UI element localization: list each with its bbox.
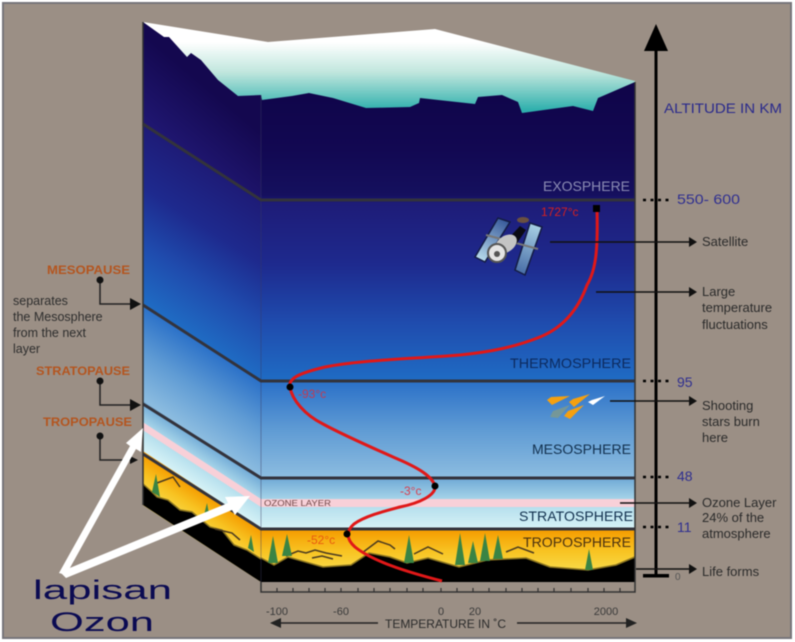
layer names [264,178,633,550]
right callouts: fluctuations [702,317,768,332]
left face upper part [143,22,261,201]
altitude values: 550- 600 [677,191,740,207]
layer names: MESOSPHERE [532,441,631,457]
altitude values: 95 [677,374,693,390]
left face of block [143,123,261,582]
left callouts: separates [13,294,68,308]
scale values [266,606,618,618]
altitude values [675,191,740,583]
left callouts: STRATOPAUSE [36,364,130,378]
icon: shooting stars [547,394,605,419]
altitude values: 0 [675,572,681,583]
atmosphere block [143,22,635,582]
right callouts: Life forms [702,564,760,579]
right callouts [550,234,777,579]
right callouts: atmosphere [702,526,771,541]
left callouts: MESOPAUSE [47,263,130,277]
callout: lapisan Ozon: lapisan [33,575,172,605]
axis caption: TEMPERATURE IN ˚C [385,617,506,631]
right callouts: temperature [702,300,772,315]
layer names: EXOSPHERE [543,178,630,194]
left callouts: from the next [13,326,86,340]
temperature readings: -3°c [400,484,421,498]
scale values: -60 [333,606,349,618]
right callouts: Satellite [702,234,748,249]
callout: lapisan Ozon [33,575,172,637]
curve markers [286,205,600,538]
temperature readings [298,205,578,547]
icon: satellite [475,217,542,275]
axis title: ALTITUDE IN KM [664,100,782,116]
altitude axis [643,24,782,583]
trees and mountains [152,474,593,570]
callout: lapisan Ozon: Ozon [50,607,154,637]
left face ground [143,484,261,582]
temperature readings: 1727°c [541,205,578,219]
temperature readings: -52°c [307,533,335,547]
left callouts: the Mesosphere [13,310,103,324]
altitude values: 11 [677,519,692,535]
right callouts: stars burn [702,414,760,429]
right callouts: Shooting [702,398,753,413]
left callouts: TROPOPAUSE [43,415,132,429]
top ice face [143,22,635,120]
temperature curve [290,209,597,581]
layer names: THERMOSPHERE [510,355,631,371]
scale values: 20 [469,606,481,618]
layer names: TROPOSPHERE [523,534,631,550]
scale values: -100 [266,606,288,618]
white arrows to ozone layer [59,428,250,578]
altitude values: 48 [677,468,693,484]
temperature readings: -93°c [298,387,326,401]
scale values: 2000 [594,606,618,618]
left callouts: layer [13,342,40,356]
ozone band [261,499,635,507]
right callouts: 24% of the [702,510,764,525]
layer boundary lines [143,124,635,529]
right callouts: Large [702,284,735,299]
scale values: 0 [438,606,444,618]
corner edge [260,95,262,582]
ground [261,553,635,582]
front face of block [261,82,635,200]
temperature axis [261,582,637,631]
right callouts: here [702,430,728,445]
layer names: STRATOSPHERE [519,508,633,524]
layer names: OZONE LAYER [264,498,331,508]
right callouts: Ozone Layer [702,495,777,510]
left callouts [13,263,141,464]
